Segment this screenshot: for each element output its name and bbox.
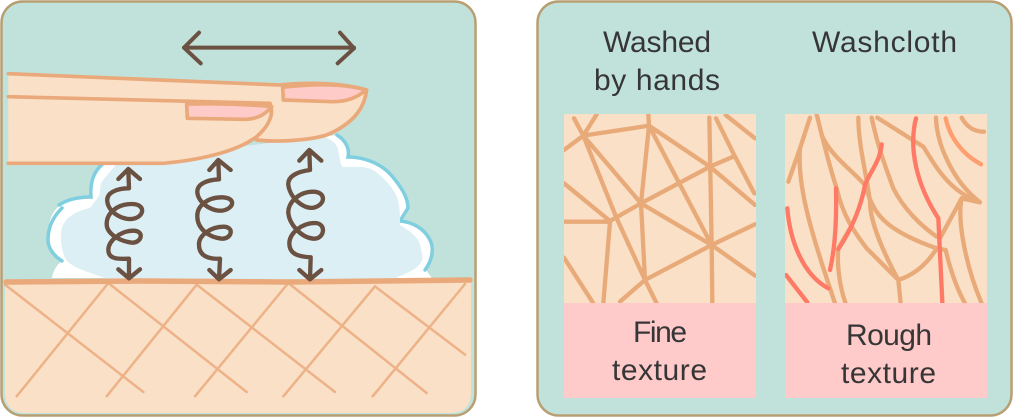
rear fingernail (283, 85, 366, 102)
spiral arrow 1 (107, 169, 142, 278)
heading: washed by hands: by hands (594, 64, 720, 97)
fine skin texture swatch (564, 114, 756, 304)
double-headed motion arrow (184, 33, 354, 63)
spiral arrow 3 (288, 150, 323, 279)
foam cloud (48, 135, 433, 282)
wavy arrows between finger and skin (107, 150, 323, 279)
rear fingertip (8, 73, 367, 141)
finger skin base (5, 280, 471, 413)
heading: washed by hands (594, 26, 720, 97)
label: fine texture: texture (612, 354, 707, 387)
heading: washcloth: Washcloth (812, 26, 957, 59)
label: fine texture (564, 303, 756, 398)
panel: finger lathering foam (2, 2, 476, 416)
rough skin texture swatch (785, 114, 987, 304)
label: rough texture: texture (841, 357, 936, 390)
front fingernail (187, 104, 272, 119)
skin surface cross-hatching (5, 283, 465, 396)
front fingertip (8, 97, 272, 163)
panel: texture comparison (538, 2, 1012, 416)
label: rough texture (785, 303, 987, 398)
heading: washed by hands: Washed (603, 26, 711, 59)
label: fine texture: Fine (633, 316, 687, 349)
label: rough texture: Rough (846, 319, 932, 352)
spiral arrow 2 (197, 160, 232, 279)
